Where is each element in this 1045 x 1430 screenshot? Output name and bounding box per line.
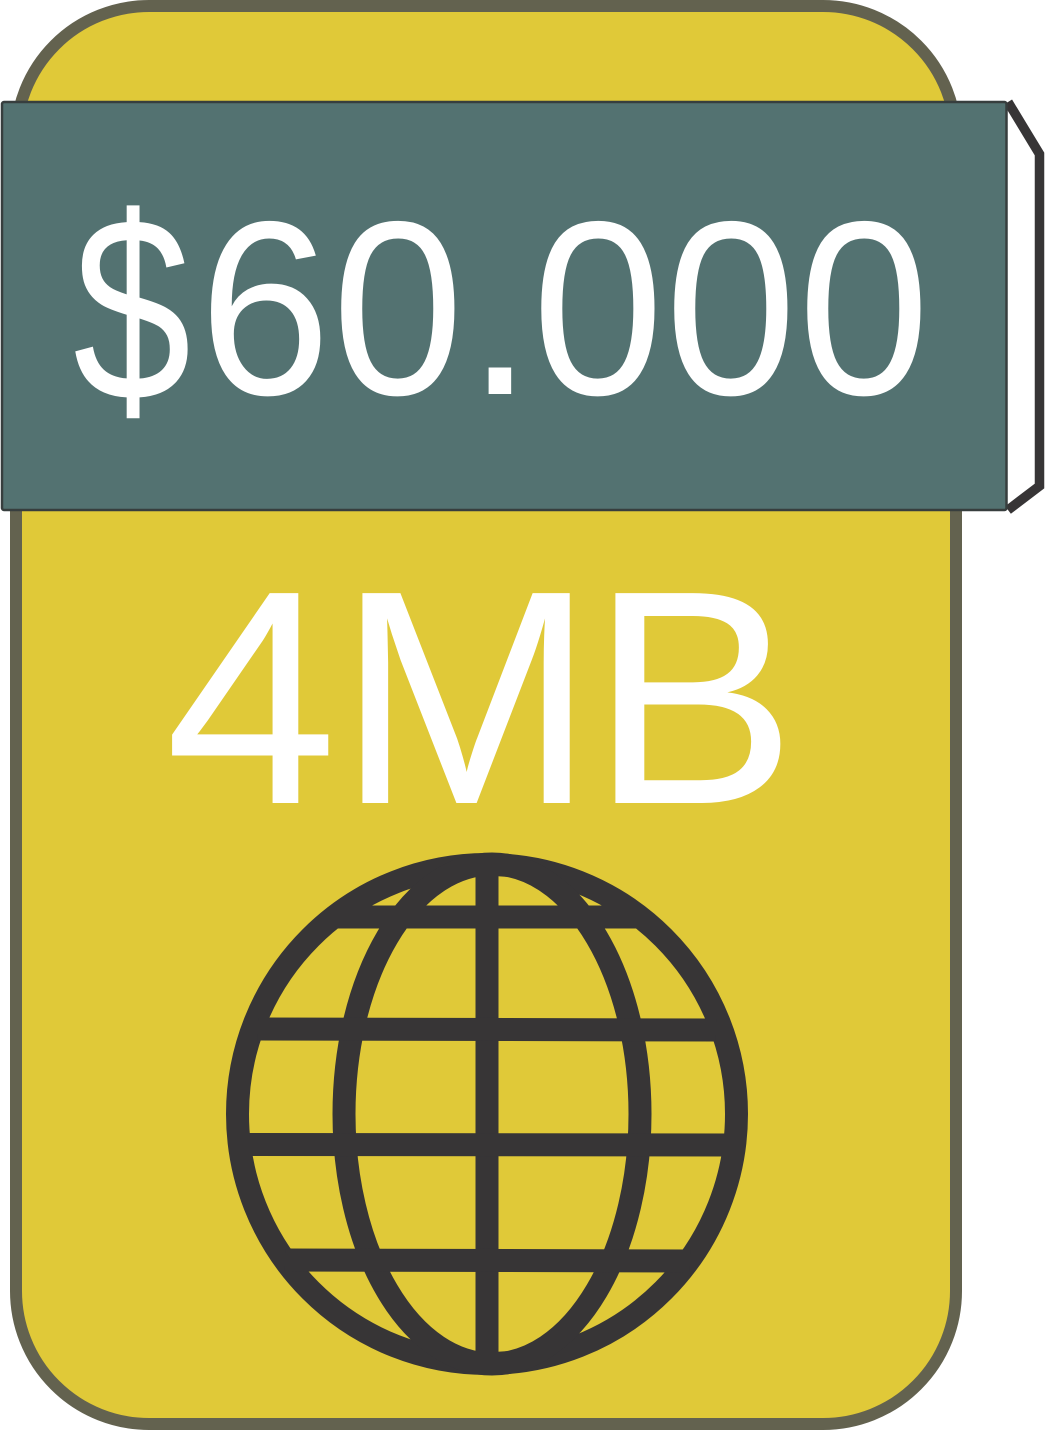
icon: globe bbox=[238, 864, 736, 1364]
price text: 60.000 bbox=[199, 170, 930, 447]
panel: price banner bbox=[2, 102, 1006, 510]
price banner side flap bbox=[1007, 102, 1040, 510]
data amount text: 4MB bbox=[165, 528, 797, 868]
price text: $ bbox=[73, 162, 191, 456]
